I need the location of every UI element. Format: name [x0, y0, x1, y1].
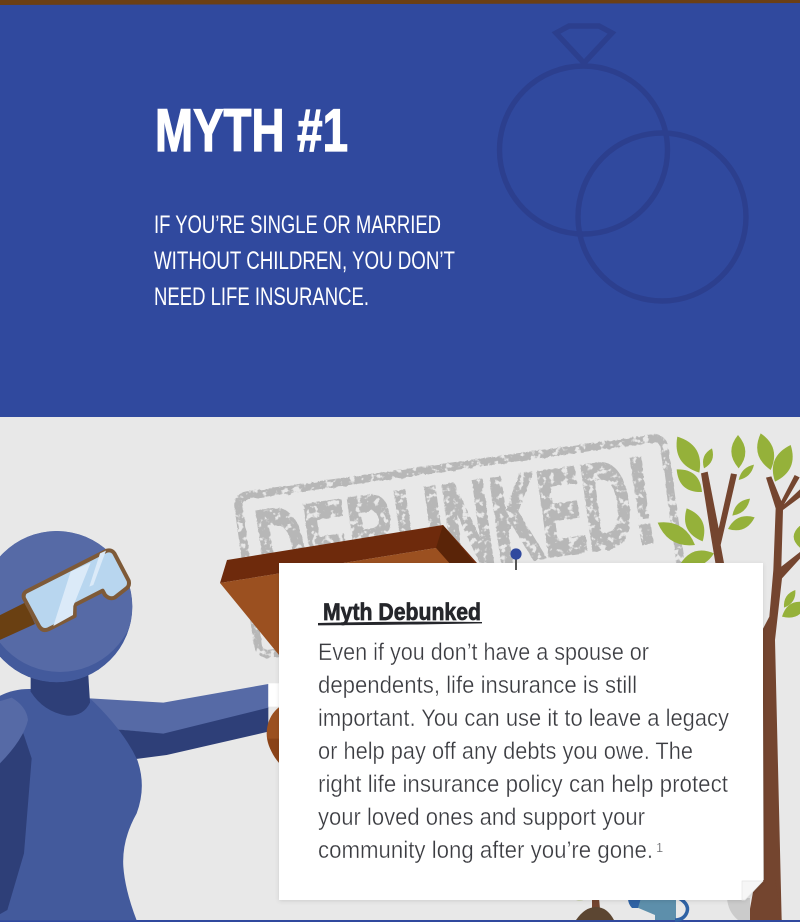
card body text: your loved ones and support your	[318, 804, 645, 831]
card body text	[318, 639, 729, 864]
pin	[510, 548, 522, 570]
illustration: small plant, watering can and pot	[576, 896, 750, 920]
myth text: IF YOU’RE SINGLE OR MARRIED	[154, 211, 441, 239]
myth text: NEED LIFE INSURANCE.	[154, 283, 369, 311]
card: myth debunked	[279, 563, 763, 900]
arm	[90, 683, 323, 767]
neck	[31, 670, 90, 716]
pin needle	[515, 563, 517, 570]
body	[0, 689, 142, 920]
head	[0, 520, 136, 682]
illustration: person with goggles	[0, 520, 323, 920]
card body text: dependents, life insurance is still	[318, 672, 637, 699]
panel: debunked scene	[0, 417, 800, 922]
card fold	[742, 881, 763, 900]
card body text: community long after you’re gone.	[318, 837, 653, 864]
panel: myth statement	[0, 0, 800, 417]
card body text: right life insurance policy can help protect	[318, 771, 728, 798]
card body text: or help pay off any debts you owe. The	[318, 738, 693, 765]
body shadow	[0, 733, 32, 915]
card body text: 1	[656, 840, 663, 855]
title: MYTH #1	[155, 97, 348, 164]
shoulder	[0, 698, 28, 765]
stamp: debunked	[237, 432, 685, 655]
illustration: brown box	[220, 525, 477, 670]
top brown edge	[0, 0, 800, 5]
trunk flare	[748, 880, 782, 920]
goggles	[0, 550, 129, 641]
myth text	[154, 211, 455, 311]
icon: wedding rings	[500, 26, 746, 301]
illustration: right tree	[748, 433, 800, 920]
illustration: left tree	[658, 435, 755, 567]
card body text: Even if you don’t have a spouse or	[318, 639, 649, 666]
card body text: important. You can use it to leave a legacy	[318, 705, 729, 732]
card heading: Myth Debunked	[323, 599, 481, 626]
myth text: WITHOUT CHILDREN, YOU DON’T	[154, 247, 455, 275]
heading underline	[318, 622, 482, 625]
